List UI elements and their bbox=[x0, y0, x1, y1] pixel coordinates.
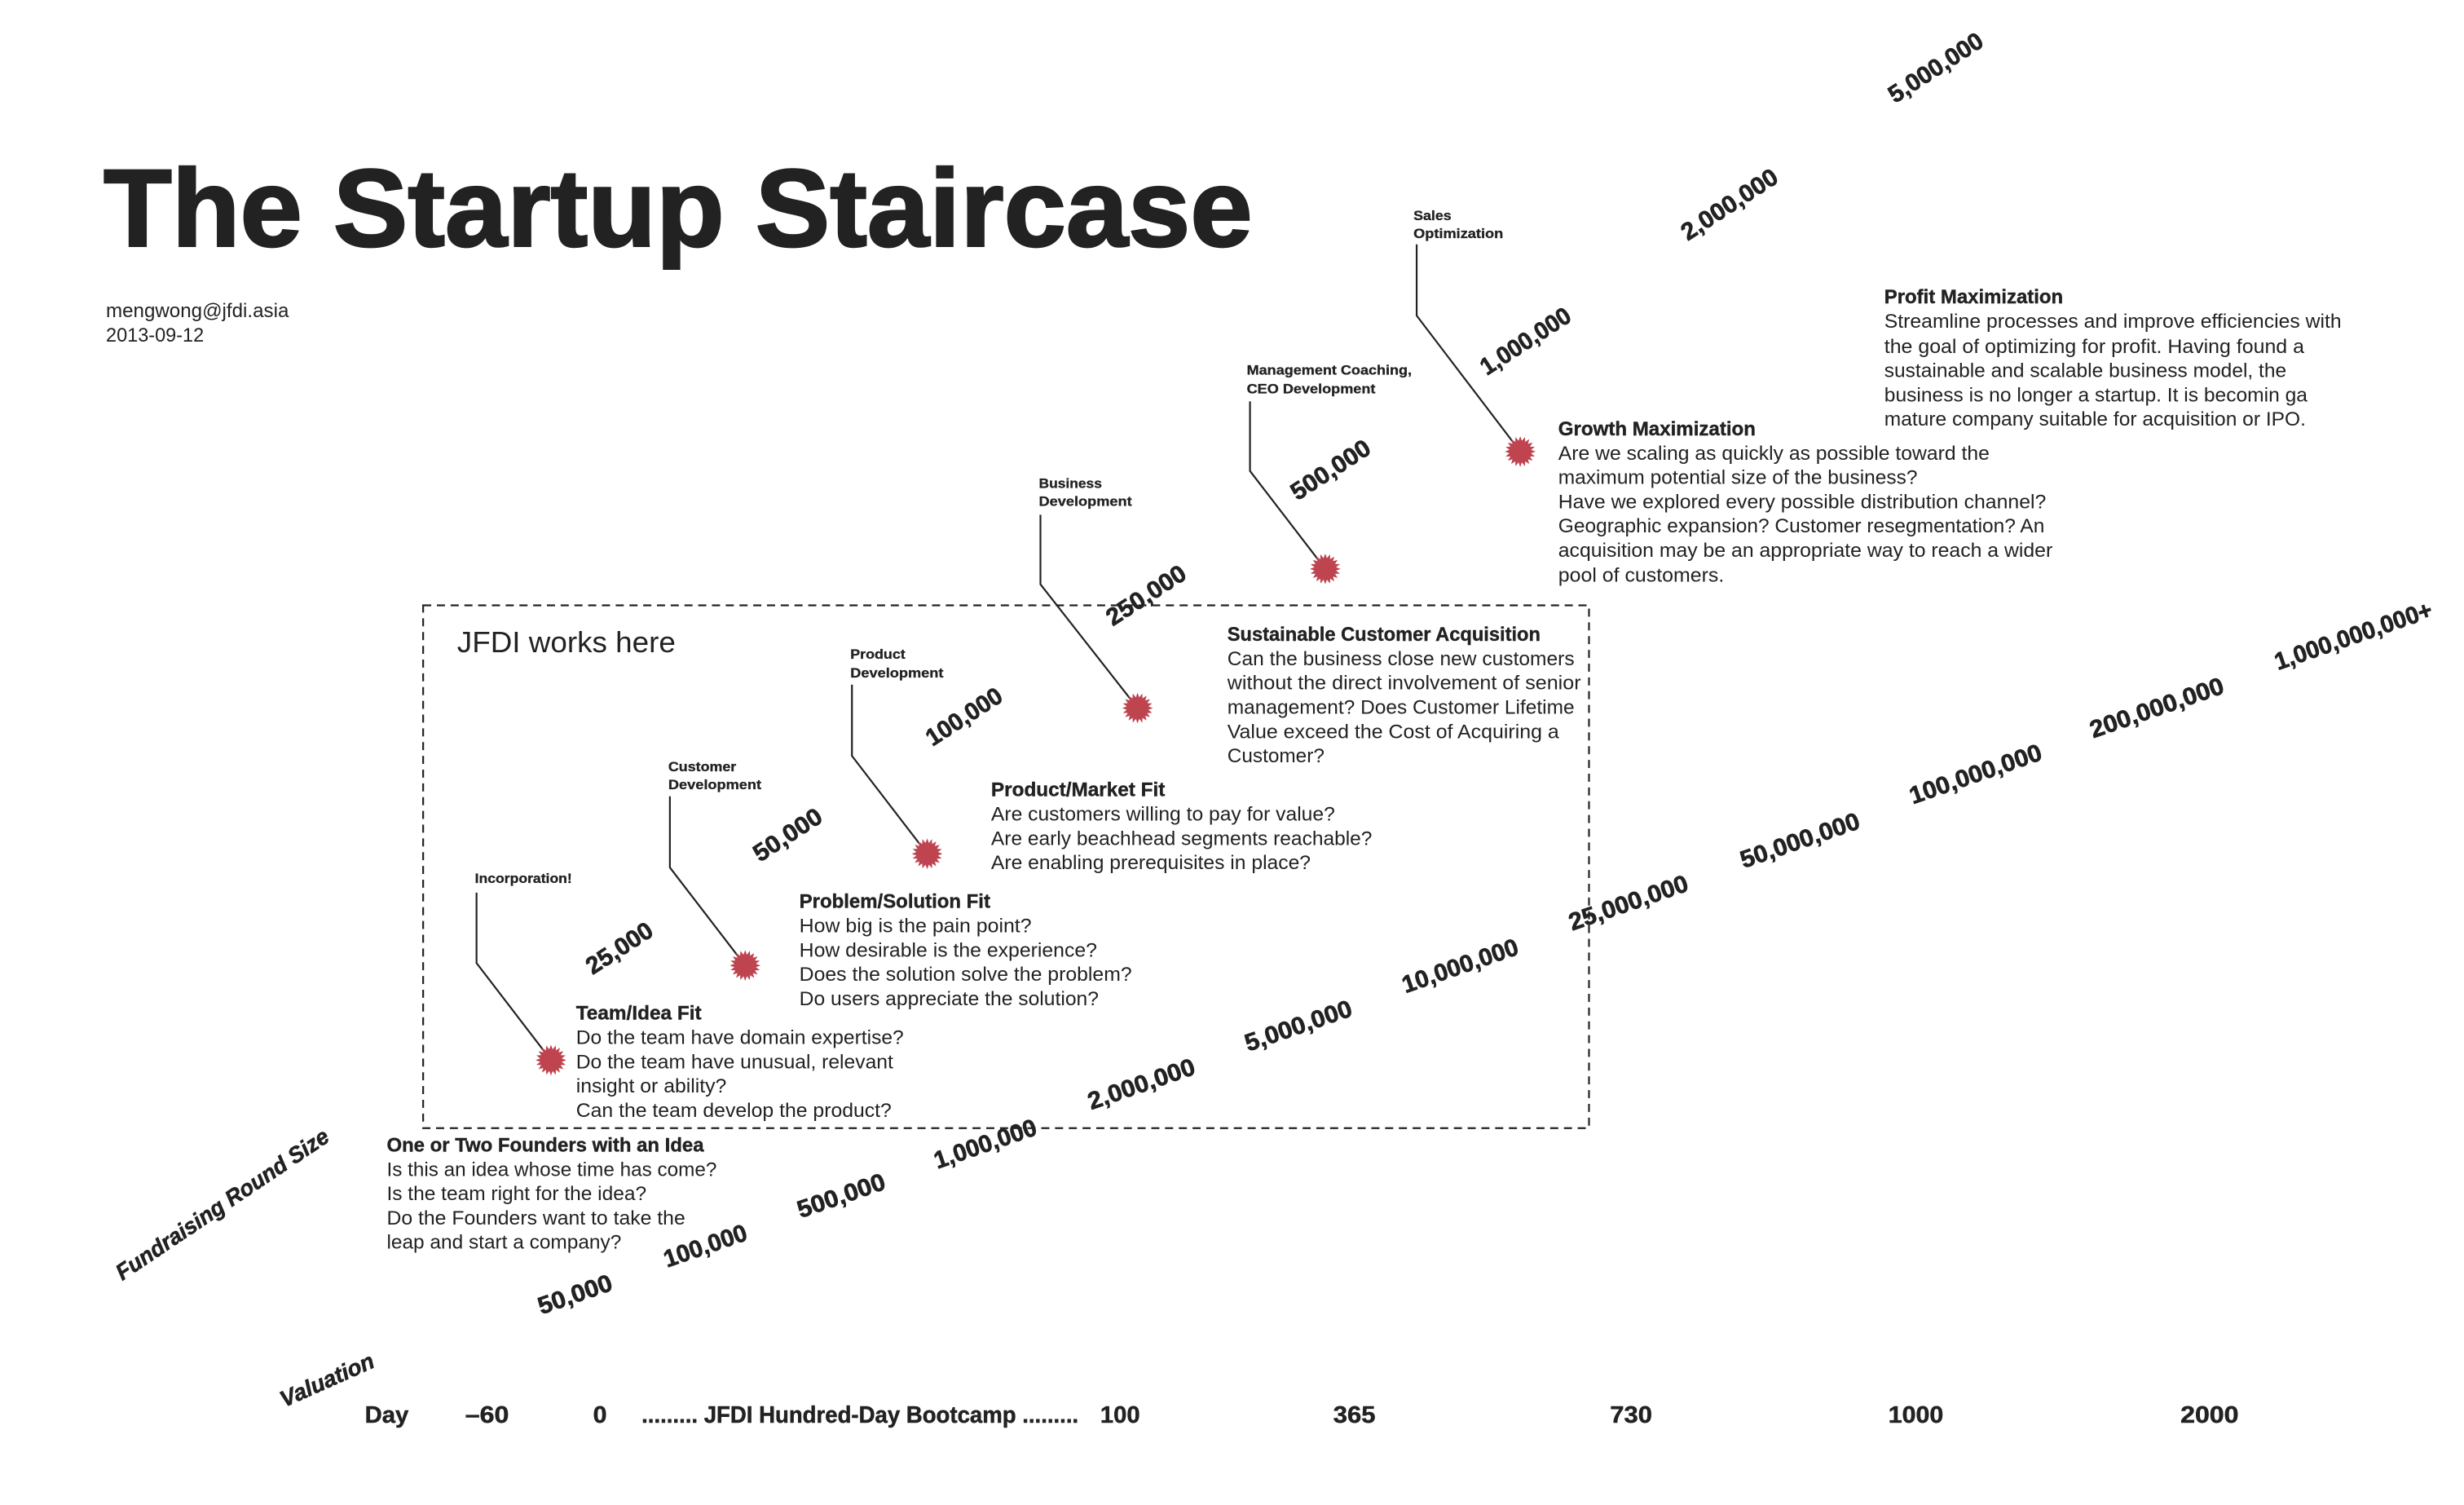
text block: Growth Maximization: Geographic expansion? Customer resegmentation? An bbox=[1558, 515, 2044, 537]
text block: Sustainable Customer Acquisition: Can the business close new customers bbox=[1228, 648, 1575, 670]
valuation values: 100,000 bbox=[660, 1220, 751, 1273]
day axis: ......... JFDI Hundred-Day Bootcamp ......... bbox=[641, 1402, 1078, 1428]
fundraising round size values: 2,000,000 bbox=[1676, 164, 1783, 246]
text block: Problem/Solution Fit: How desirable is the experience? bbox=[800, 939, 1097, 961]
text block: Sustainable Customer Acquisition: Customer? bbox=[1228, 745, 1325, 767]
day axis: 100 bbox=[1100, 1402, 1140, 1428]
day axis: 365 bbox=[1333, 1402, 1375, 1428]
text block: Product/Market Fit: Are enabling prerequisites in place? bbox=[991, 852, 1311, 874]
milestone: Product Development bbox=[850, 647, 944, 869]
text block: Team/Idea Fit: insight or ability? bbox=[576, 1075, 726, 1097]
valuation values: 1,000,000,000+ bbox=[2271, 597, 2435, 676]
milestone: Sales Optimization: Optimization bbox=[1413, 226, 1503, 241]
axis label: Fundraising Round Size: Fundraising Round Size bbox=[111, 1123, 333, 1285]
valuation values: 2,000,000 bbox=[1084, 1053, 1199, 1115]
text block: One or Two Founders: Do the Founders want to take the bbox=[386, 1207, 685, 1229]
fundraising round size values: 1,000,000 bbox=[1475, 302, 1576, 381]
valuation values: 25,000,000 bbox=[1565, 870, 1692, 936]
day axis: 2000 bbox=[2180, 1402, 2239, 1428]
text block: Team/Idea Fit: Do the team have domain expertise? bbox=[576, 1026, 904, 1048]
day axis: Day bbox=[365, 1402, 408, 1428]
text block: Profit Maximization: the goal of optimizing for profit. Having found a bbox=[1884, 336, 2305, 358]
milestone: Sales Optimization bbox=[1413, 208, 1536, 467]
day axis: –60 bbox=[465, 1402, 509, 1428]
text block: Team/Idea Fit: Team/Idea Fit bbox=[576, 1003, 702, 1025]
milestone: Business Development: Development bbox=[1039, 493, 1132, 509]
text block: Problem/Solution Fit: How big is the pain point? bbox=[800, 916, 1032, 938]
panel: JFDI works here dashed box bbox=[423, 605, 1589, 1128]
text block: Growth Maximization: Are we scaling as quickly as possible toward the bbox=[1558, 443, 1990, 465]
text block: Sustainable Customer Acquisition: management? Does Customer Lifetime bbox=[1228, 697, 1575, 719]
fundraising round size values: 25,000 bbox=[581, 917, 658, 980]
text block: Growth Maximization: pool of customers. bbox=[1558, 565, 1724, 587]
fundraising round size values: 250,000 bbox=[1101, 560, 1192, 631]
text block: Sustainable Customer Acquisition: Sustainable Customer Acquisition bbox=[1228, 624, 1541, 646]
milestone: Management Coaching: Management Coaching, bbox=[1247, 363, 1412, 378]
text block: Profit Maximization: Profit Maximization bbox=[1884, 286, 2063, 308]
text block: Team/Idea Fit bbox=[576, 1003, 904, 1122]
panel: JFDI works here dashed box: JFDI works here bbox=[457, 626, 676, 659]
text block: Sustainable Customer Acquisition: Value exceed the Cost of Acquiring a bbox=[1228, 721, 1560, 743]
text block: Problem/Solution Fit: Do users appreciate the solution? bbox=[800, 988, 1099, 1010]
text block: One or Two Founders: Is this an idea whose time has come? bbox=[386, 1159, 716, 1181]
text block: Sustainable Customer Acquisition: without the direct involvement of senior bbox=[1227, 673, 1581, 695]
milestone: Management Coaching: CEO Development bbox=[1247, 381, 1376, 396]
valuation values: 100,000,000 bbox=[1906, 739, 2045, 810]
text block: Team/Idea Fit: Can the team develop the product? bbox=[576, 1100, 892, 1122]
text block: One or Two Founders: One or Two Founders with an Idea bbox=[386, 1135, 704, 1157]
day axis: 1000 bbox=[1889, 1402, 1943, 1428]
fundraising round size values: 500,000 bbox=[1285, 435, 1376, 506]
text block: One or Two Founders: leap and start a company? bbox=[386, 1232, 621, 1254]
text block: Profit Maximization: Streamline processes and improve efficiencies with bbox=[1884, 311, 2342, 333]
milestone: Incorporation bbox=[475, 871, 572, 1075]
valuation values: 50,000,000 bbox=[1737, 808, 1863, 874]
milestone: Customer Development: Customer bbox=[668, 759, 737, 775]
valuation values: 200,000,000 bbox=[2087, 673, 2228, 744]
text block: One or Two Founders bbox=[386, 1135, 716, 1254]
text block: Sustainable Customer Acquisition bbox=[1227, 624, 1581, 767]
valuation values: 5,000,000 bbox=[1241, 995, 1355, 1057]
text block: Profit Maximization bbox=[1884, 286, 2342, 430]
text block: Growth Maximization: maximum potential size of the business? bbox=[1558, 467, 1917, 489]
milestone: Sales Optimization: Sales bbox=[1413, 208, 1452, 223]
fundraising round size values: 100,000 bbox=[921, 682, 1007, 752]
text block: Growth Maximization bbox=[1558, 418, 2052, 587]
text block: Problem/Solution Fit: Does the solution solve the problem? bbox=[800, 964, 1132, 986]
valuation values bbox=[535, 597, 2435, 1320]
milestone: Business Development: Business bbox=[1039, 476, 1102, 492]
text block: Growth Maximization: Have we explored every possible distribution channel? bbox=[1558, 491, 2046, 513]
milestone: Business Development bbox=[1039, 476, 1153, 723]
day axis bbox=[365, 1402, 2239, 1428]
text block: Problem/Solution Fit bbox=[800, 891, 1132, 1010]
text block: Profit Maximization: sustainable and scalable business model, the bbox=[1884, 360, 2286, 382]
text block: Product/Market Fit: Are early beachhead segments reachable? bbox=[991, 828, 1372, 850]
valuation values: 50,000 bbox=[535, 1269, 616, 1320]
text block: Product/Market Fit: Are customers willing to pay for value? bbox=[991, 804, 1335, 826]
milestone: Product Development: Development bbox=[850, 665, 944, 681]
author and date: mengwong@jfdi.asia bbox=[106, 300, 289, 322]
valuation values: 500,000 bbox=[794, 1168, 889, 1224]
author and date: 2013-09-12 bbox=[106, 324, 204, 346]
text block: Growth Maximization: acquisition may be an appropriate way to reach a wider bbox=[1558, 540, 2052, 562]
milestone: Management Coaching bbox=[1247, 363, 1412, 585]
text block: Team/Idea Fit: Do the team have unusual, relevant bbox=[576, 1051, 893, 1073]
text block: Product/Market Fit: Product/Market Fit bbox=[991, 779, 1165, 801]
fundraising round size values bbox=[581, 28, 1988, 980]
fundraising round size values: 5,000,000 bbox=[1884, 28, 1988, 108]
text block: Growth Maximization: Growth Maximization bbox=[1558, 418, 1756, 440]
text block: One or Two Founders: Is the team right for the idea? bbox=[386, 1183, 646, 1205]
fundraising round size values: 50,000 bbox=[748, 803, 827, 867]
valuation values: 10,000,000 bbox=[1399, 933, 1522, 999]
text block: Problem/Solution Fit: Problem/Solution Fit bbox=[800, 891, 990, 913]
author and date bbox=[106, 300, 289, 346]
axis label: Valuation: Valuation bbox=[276, 1348, 378, 1412]
text block: Product/Market Fit bbox=[991, 779, 1372, 874]
milestone: Customer Development: Development bbox=[668, 777, 761, 792]
text block: Profit Maximization: mature company suitable for acquisition or IPO. bbox=[1884, 408, 2306, 430]
milestone: Incorporation: Incorporation! bbox=[475, 871, 572, 886]
milestone: Customer Development bbox=[668, 759, 761, 981]
title: The Startup Staircase bbox=[104, 147, 1253, 270]
milestone: Product Development: Product bbox=[850, 647, 906, 662]
text block: Profit Maximization: business is no longer a startup. It is becomin ga bbox=[1884, 384, 2308, 406]
valuation values: 1,000,000 bbox=[931, 1114, 1040, 1174]
day axis: 0 bbox=[593, 1402, 606, 1428]
day axis: 730 bbox=[1610, 1402, 1652, 1428]
